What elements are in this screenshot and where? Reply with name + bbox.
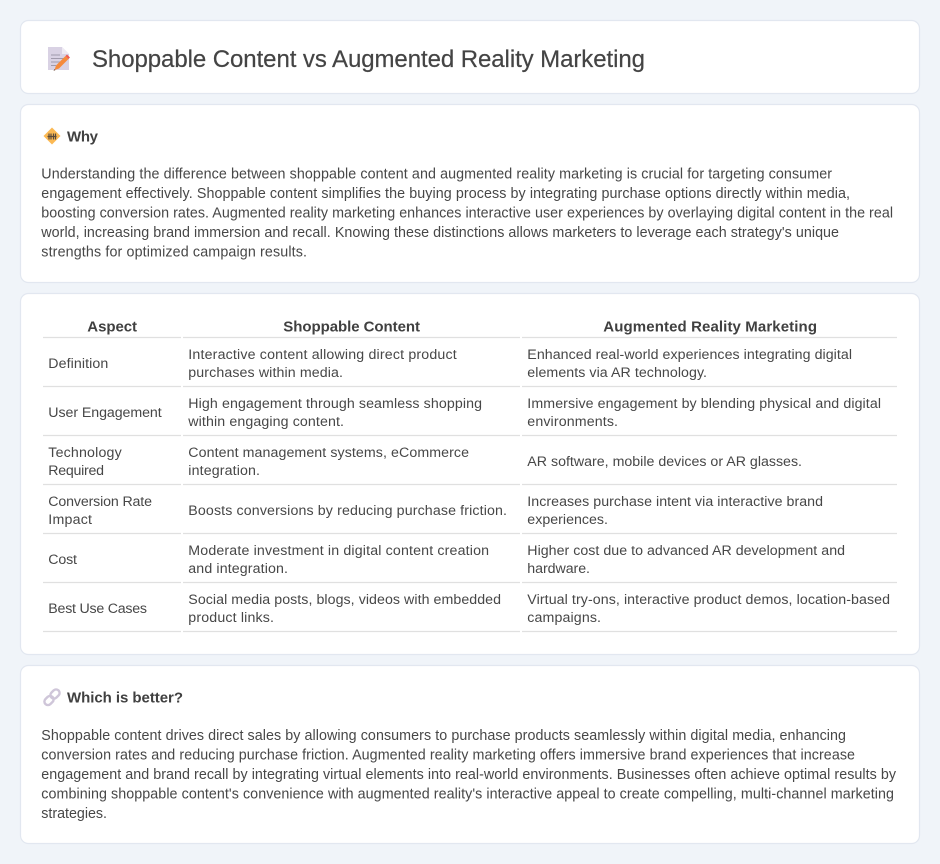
row: user engagement: environments. [527, 414, 618, 430]
row: technology required: integration. [188, 463, 260, 479]
row: user engagement: User Engagement [48, 405, 162, 421]
row: conversion rate impact: Increases purchase intent via interactive brand [527, 494, 823, 510]
row: best use cases: product links. [188, 610, 274, 626]
row: best use cases: Social media posts, blogs, videos with embedded [188, 592, 501, 608]
row: definition: Interactive content allowing direct product [188, 347, 457, 363]
row: best use cases: campaigns. [527, 610, 601, 626]
row: cost: Higher cost due to advanced AR development and [527, 543, 845, 559]
row: definition: Definition [48, 356, 108, 372]
text block: which is better paragraph [41, 728, 897, 822]
panel: header [20, 20, 920, 94]
row: technology required [43, 445, 897, 484]
row: definition: Enhanced real-world experiences integrating digital [527, 347, 852, 363]
row: technology required: Content management systems, eCommerce [188, 445, 469, 461]
row: technology required: AR software, mobile devices or AR glasses. [527, 454, 802, 470]
row: definition: elements via AR technology. [527, 365, 707, 381]
icon: chain link [43, 688, 61, 707]
icon: document with pencil [48, 47, 70, 71]
row: cost: Cost [48, 552, 77, 568]
text block: which is better paragraph: conversion rates and reducing purchase friction. Augmented reality marketing offers immersive brand experiences that increase [41, 748, 855, 764]
panel: comparison table [20, 294, 920, 654]
row: conversion rate impact: Conversion Rate [48, 494, 152, 510]
row: technology required: Required [48, 463, 104, 479]
text block: why paragraph [40, 166, 893, 260]
panel: why [20, 104, 920, 282]
text block: why paragraph: Understanding the difference between shoppable content and augmented reality marketing is crucial for targeting consumer [41, 166, 832, 182]
row: cost: Moderate investment in digital content creation [188, 543, 489, 559]
text block: why paragraph: strengths for optimized campaign results. [41, 244, 307, 260]
text block: why paragraph: world, increasing brand immersion and recall. Knowing these distinctions allows marketers to leverage each strategy's unique [40, 225, 839, 241]
table header row: Augmented Reality Marketing [603, 318, 817, 336]
heading: why: Why [67, 128, 99, 146]
text block: which is better paragraph: Shoppable content drives direct sales by allowing consumers to purchase products seamlessly within digital media, enhancing [41, 728, 846, 744]
row: definition: purchases within media. [188, 365, 343, 381]
table header row: Aspect [87, 318, 137, 336]
row: best use cases [43, 592, 897, 632]
text block: which is better paragraph: strategies. [41, 806, 107, 822]
row: cost [43, 543, 897, 582]
row: best use cases: Best Use Cases [48, 601, 147, 617]
heading: which is better: Which is better? [67, 690, 183, 706]
text block: which is better paragraph: combining shoppable content's convenience with augmented reality's interactive appeal to create compelling, multi-channel marketing [41, 786, 894, 802]
text block: why paragraph: engagement effectively. Shoppable content simplifies the buying process by integrating purchase options directly within media, [41, 186, 850, 202]
row: user engagement [43, 396, 897, 436]
row: conversion rate impact [43, 494, 897, 534]
row: cost: hardware. [527, 561, 590, 577]
text block: which is better paragraph: engagement and brand recall by integrating virtual elements into real-world environments. Businesses often achieve optimal results by [41, 767, 897, 783]
row: best use cases: Virtual try-ons, interactive product demos, location-based [527, 592, 890, 608]
title: Shoppable Content vs Augmented Reality Marketing [92, 46, 645, 73]
row: user engagement: within engaging content. [187, 414, 344, 430]
row: conversion rate impact: Boosts conversions by reducing purchase friction. [188, 503, 507, 519]
table header row: Shoppable Content [283, 318, 420, 336]
row: user engagement: Immersive engagement by blending physical and digital [527, 396, 881, 412]
row: conversion rate impact: experiences. [527, 512, 608, 528]
row: conversion rate impact: Impact [48, 512, 92, 528]
row: definition [43, 347, 897, 386]
panel: which is better [20, 666, 920, 844]
row: cost: and integration. [188, 561, 288, 577]
icon: diamond sign [44, 128, 60, 144]
text block: why paragraph: boosting conversion rates. Augmented reality marketing enhances interactive user experiences by overlaying digital content in the real [41, 206, 893, 222]
row: technology required: Technology [48, 445, 123, 461]
table header row [43, 318, 897, 338]
row: user engagement: High engagement through seamless shopping [188, 396, 482, 412]
